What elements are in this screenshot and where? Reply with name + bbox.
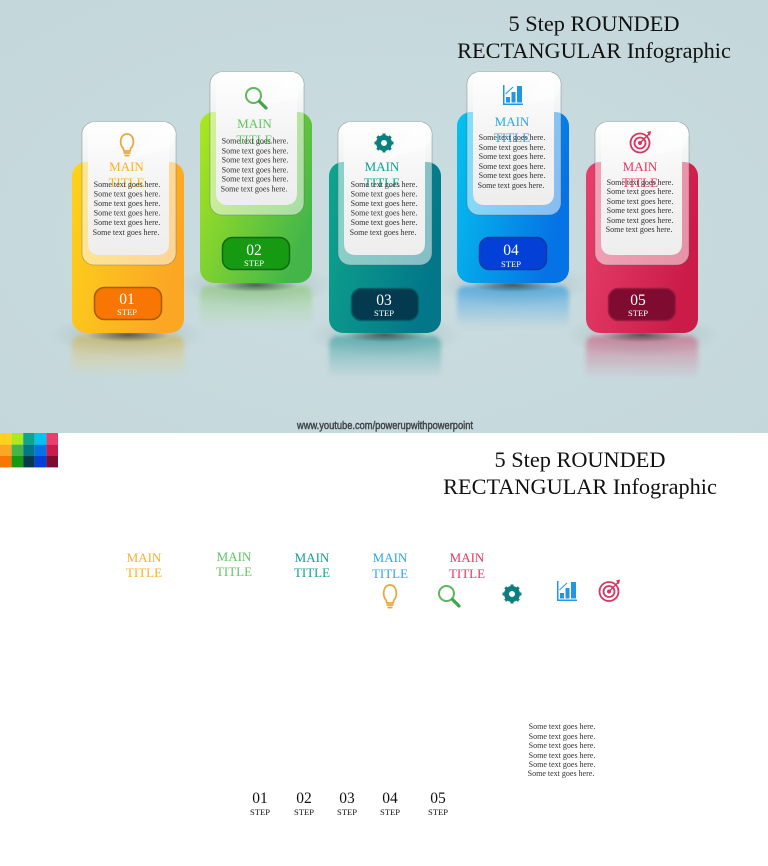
text block: Some text goes here. xyxy=(351,208,417,218)
main title: MAIN xyxy=(495,114,530,129)
colour swatches xyxy=(0,433,58,467)
main title: TITLE xyxy=(494,130,530,145)
text block: Some text goes here. xyxy=(221,184,287,194)
text block: Some text goes here. xyxy=(607,206,673,215)
text block: Some text goes here. xyxy=(94,218,160,227)
text block: Some text goes here. xyxy=(94,208,160,218)
step badge: 02 xyxy=(246,242,262,259)
step badge: STEP xyxy=(628,308,648,318)
step badge: 03 xyxy=(376,292,392,309)
main title xyxy=(108,159,145,190)
panel: step 05 xyxy=(564,122,720,378)
text block: Some text goes here. xyxy=(479,133,545,142)
lower icon: magnifier xyxy=(439,586,459,606)
main title xyxy=(494,114,530,145)
text block: Some text goes here. xyxy=(479,143,545,152)
text block: Some text goes here. xyxy=(351,180,417,189)
icon: light bulb xyxy=(121,134,133,156)
lower title xyxy=(443,447,717,499)
title xyxy=(457,11,731,63)
main title: TITLE xyxy=(236,132,273,147)
text block: Some text goes here. xyxy=(351,190,417,198)
main title xyxy=(236,116,273,147)
panel: step 01 xyxy=(50,122,206,378)
lower step labels: 01 xyxy=(252,790,268,807)
lower step labels xyxy=(250,790,448,817)
lower text block: Some text goes here. xyxy=(529,760,595,769)
lower text block: Some text goes here. xyxy=(528,769,594,778)
text block: Some text goes here. xyxy=(94,199,160,208)
main title: MAIN xyxy=(109,159,144,174)
lower step labels: 02 xyxy=(296,790,312,807)
lower icon: gear xyxy=(502,584,522,604)
step badge: STEP xyxy=(374,308,394,318)
step badge xyxy=(608,288,676,320)
lower main titles: MAIN xyxy=(295,550,330,565)
step badge: 05 xyxy=(630,292,646,309)
step badge: 04 xyxy=(503,242,519,259)
lower main titles: TITLE xyxy=(294,565,330,580)
main title xyxy=(364,159,400,190)
lower step labels: 04 xyxy=(382,790,398,807)
main title: MAIN xyxy=(365,159,400,174)
text block: Some text goes here. xyxy=(479,152,545,161)
step badge: 01 xyxy=(119,291,135,308)
lower text block: Some text goes here. xyxy=(529,751,595,760)
icon: bar chart xyxy=(503,85,523,105)
lower text block: Some text goes here. xyxy=(529,741,595,750)
lower main titles: TITLE xyxy=(216,564,252,579)
text block: Some text goes here. xyxy=(222,174,288,184)
text block xyxy=(606,178,673,234)
step badge xyxy=(94,288,162,320)
lower step labels: 05 xyxy=(430,790,446,807)
lower step labels: STEP xyxy=(337,807,357,817)
text block: Some text goes here. xyxy=(479,162,545,171)
lower step labels: STEP xyxy=(380,807,400,817)
text block: Some text goes here. xyxy=(607,216,673,225)
text block: Some text goes here. xyxy=(479,171,545,180)
lower icon: light bulb xyxy=(384,585,396,608)
text block: Some text goes here. xyxy=(607,178,673,187)
lower main titles: TITLE xyxy=(449,566,485,581)
text block: Some text goes here. xyxy=(222,136,288,146)
lower text block: Some text goes here. xyxy=(529,722,595,731)
step badge xyxy=(480,238,546,270)
lower main titles xyxy=(126,549,485,581)
icon: gear xyxy=(374,134,394,152)
lower step labels: STEP xyxy=(294,807,314,817)
step badge: STEP xyxy=(501,259,521,269)
lower text block: Some text goes here. xyxy=(529,732,595,741)
lower main titles: MAIN xyxy=(373,550,408,565)
text block xyxy=(93,180,160,237)
lower main titles: MAIN xyxy=(127,550,162,565)
lower main titles: TITLE xyxy=(372,566,408,581)
text block: Some text goes here. xyxy=(94,180,160,189)
panel: step 04 xyxy=(435,72,591,328)
lower icon: target xyxy=(600,580,620,601)
text block: Some text goes here. xyxy=(350,228,416,237)
lower icon: bar chart xyxy=(557,581,577,601)
main title: MAIN xyxy=(237,116,272,131)
text block: Some text goes here. xyxy=(607,187,673,196)
text block: Some text goes here. xyxy=(93,228,159,237)
lower main titles: MAIN xyxy=(217,549,252,564)
step badge: STEP xyxy=(244,258,264,268)
text block: Some text goes here. xyxy=(351,199,417,208)
text block: Some text goes here. xyxy=(222,166,288,174)
lower main titles: TITLE xyxy=(126,565,162,580)
lower step labels: 03 xyxy=(339,790,355,807)
text block: Some text goes here. xyxy=(351,218,417,227)
text block xyxy=(350,180,417,237)
step badge: STEP xyxy=(117,307,137,317)
icon: target xyxy=(630,131,651,152)
main title: TITLE xyxy=(364,175,400,190)
background panel xyxy=(0,0,768,433)
main title xyxy=(622,159,658,190)
text block: Some text goes here. xyxy=(478,181,544,190)
text block: Some text goes here. xyxy=(94,190,160,198)
title: RECTANGULAR Infographic xyxy=(457,38,731,63)
main title: TITLE xyxy=(108,175,145,190)
text block xyxy=(221,136,288,194)
text block: Some text goes here. xyxy=(607,197,673,206)
panel: step 02 xyxy=(178,72,334,328)
source url: www.youtube.com/powerupwithpowerpoint xyxy=(296,420,473,432)
step badge xyxy=(352,288,418,320)
lower step labels: STEP xyxy=(250,807,270,817)
title: 5 Step ROUNDED xyxy=(509,11,679,36)
lower step labels: STEP xyxy=(428,807,448,817)
lower title: RECTANGULAR Infographic xyxy=(443,474,717,499)
lower text block xyxy=(528,722,595,778)
panel: step 03 xyxy=(307,122,463,378)
main title: MAIN xyxy=(623,159,658,174)
text block xyxy=(478,133,545,190)
text block: Some text goes here. xyxy=(222,146,288,156)
text block: Some text goes here. xyxy=(222,156,288,164)
lower title: 5 Step ROUNDED xyxy=(495,447,665,472)
icon: magnifier xyxy=(246,88,266,108)
text block: Some text goes here. xyxy=(606,225,672,234)
main title: TITLE xyxy=(622,175,658,190)
lower main titles: MAIN xyxy=(450,550,485,565)
step badge xyxy=(222,238,290,270)
